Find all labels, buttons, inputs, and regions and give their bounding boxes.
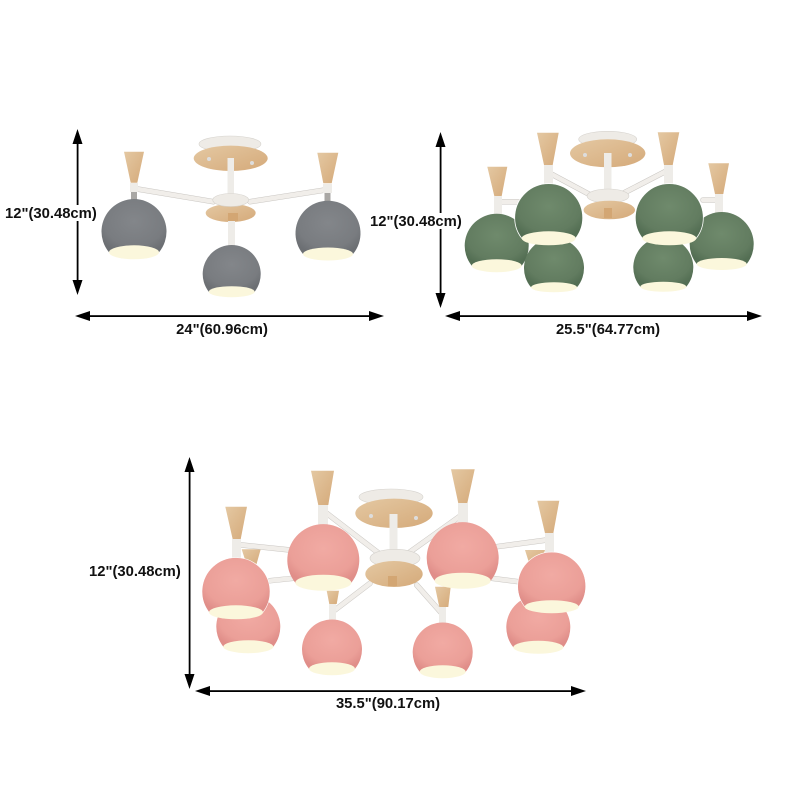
arrow: pink height bbox=[184, 457, 194, 689]
hub bbox=[365, 549, 423, 587]
label: green height: 12"(30.48cm) bbox=[370, 214, 462, 230]
hub bbox=[206, 194, 256, 246]
arrow: grey width bbox=[75, 311, 384, 321]
canopy bbox=[570, 131, 645, 193]
wooden cones bbox=[124, 152, 338, 201]
arms bbox=[498, 170, 718, 202]
label: pink height: 12"(30.48cm) bbox=[89, 564, 181, 580]
label: grey height: 12"(30.48cm) bbox=[5, 206, 97, 222]
arrow: grey height bbox=[72, 129, 82, 295]
arrow: green height bbox=[436, 132, 446, 308]
green globe shades bbox=[465, 184, 754, 292]
arrow: pink width bbox=[195, 686, 586, 696]
green six-light chandelier bbox=[465, 131, 754, 292]
wooden cones bbox=[225, 469, 559, 627]
grey globe shades bbox=[102, 199, 361, 297]
label: green width: 25.5"(64.77cm) bbox=[556, 322, 660, 338]
hidden and lower cones bbox=[242, 549, 545, 607]
arrow: green width bbox=[445, 311, 762, 321]
grey three-light chandelier bbox=[102, 136, 361, 297]
pink eight-light chandelier bbox=[202, 469, 586, 678]
canopy bbox=[355, 489, 433, 554]
arms bbox=[242, 513, 547, 613]
wooden cones bbox=[487, 132, 729, 218]
pink globe shades bbox=[202, 522, 586, 678]
canopy bbox=[194, 136, 268, 196]
label: pink width: 35.5"(90.17cm) bbox=[336, 696, 440, 712]
label: grey width: 24"(60.96cm) bbox=[176, 322, 268, 338]
arms bbox=[137, 189, 325, 202]
hub bbox=[584, 189, 635, 219]
